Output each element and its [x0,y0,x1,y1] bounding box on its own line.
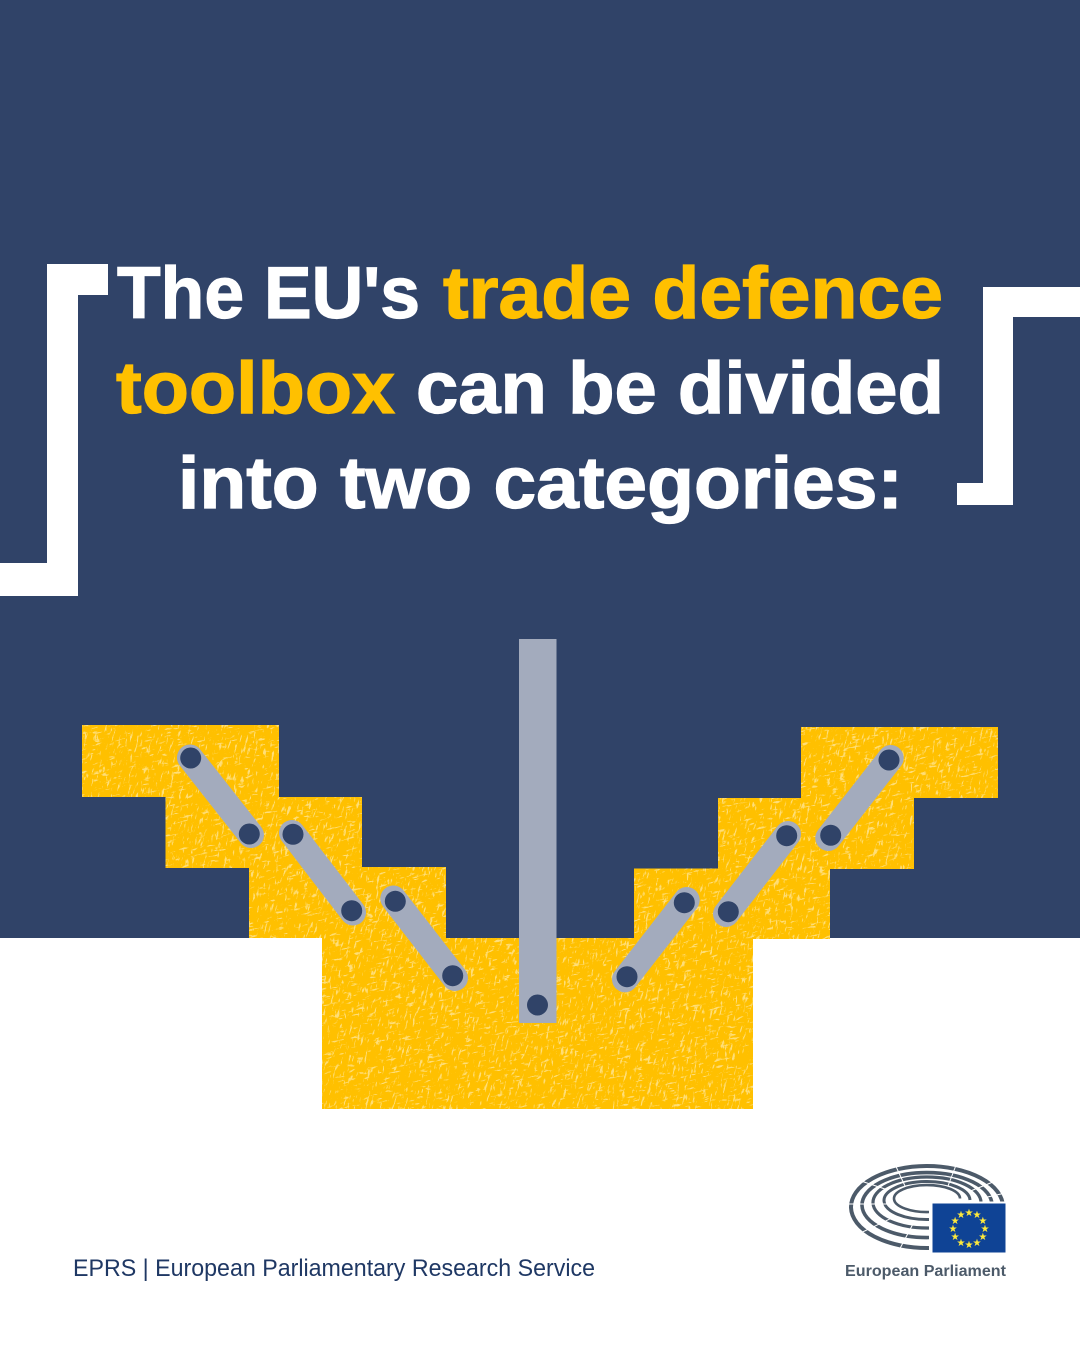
icon: EU flag: ★ [949,1224,958,1235]
left bracket [0,264,108,596]
icon: EU flag [930,1202,1007,1254]
title [116,253,944,524]
logo wordmark: European Parliament [845,1263,1007,1280]
right bracket [957,287,1080,505]
icon: EU flag: ★ [978,1216,987,1227]
left levers [180,748,463,986]
title: trade defence [443,253,943,334]
logo: European Parliament [842,1160,1010,1280]
title: into two categories: [178,443,903,524]
icon: EU flag: ★ [978,1232,987,1243]
icon: EU flag: ★ [965,1208,974,1219]
icon: EU flag: ★ [957,1238,966,1249]
panel: navy background [0,0,1080,938]
icon: EU flag: ★ [973,1238,982,1249]
title: toolbox [116,348,395,429]
icon: hemicycle [842,1160,1010,1256]
central vertical bar [519,639,556,1023]
yellow textured staircase block [82,725,998,1109]
right levers [616,750,900,987]
title: can be divided [416,348,944,429]
title: The EU's [117,253,420,334]
illustration: yellow stepped portcullis base with levers [82,639,998,1109]
icon: EU flag: ★ [973,1210,982,1221]
icon: EU flag: ★ [951,1232,960,1243]
icon: EU flag: ★ [957,1210,966,1221]
icon: EU flag: ★ [965,1240,974,1251]
icon: EU flag: ★ [951,1216,960,1227]
icon: EU flag: ★ [981,1224,990,1235]
footer credit: EPRS | European Parliamentary Research Service [73,1255,595,1282]
